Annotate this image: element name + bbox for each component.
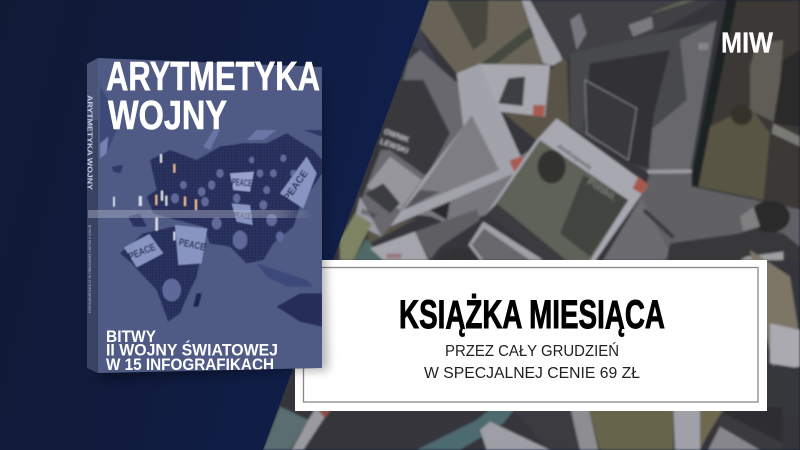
Iceland: [112, 165, 123, 173]
white cover V BOJU: [522, 0, 570, 66]
subtitle: BITWY: [106, 327, 157, 346]
book spine: [86, 58, 98, 373]
books top-left part of photo: MIW: [387, 251, 402, 260]
wood table: [500, 57, 570, 147]
Indonesia: [257, 263, 313, 287]
white book with red corner: [390, 64, 526, 227]
lower-left books: [370, 232, 428, 260]
inner frame: [304, 268, 758, 402]
blue strip: [412, 28, 437, 65]
book NOWIK: [353, 50, 481, 237]
bottom strip books: [263, 407, 783, 450]
books top-left part of photo: LEWSKI: [379, 137, 410, 155]
Arctic fragments: [203, 130, 220, 150]
subtitle line 2: W SPECJALNEJ CENIE 69 ZŁ: [424, 365, 640, 382]
PEACE signs: PEACE: [282, 168, 311, 203]
book shadow: [95, 75, 328, 380]
PEACE signs: [124, 157, 317, 267]
book: Arytmetyka wojny: WOJNY: [108, 92, 227, 138]
title: ARYTMETYKA: [106, 53, 320, 99]
books top-left part of photo: V BOJU: [538, 4, 575, 64]
background photo: scattered books: [250, 0, 800, 450]
heading: KSIĄŻKA MIESIĄCA: [399, 293, 665, 337]
subtitle: W 15 INFOGRAFIKACH: [106, 355, 274, 374]
PEACE signs: PEACE: [127, 242, 158, 263]
photo with soldier: [603, 173, 800, 260]
books top-left part of photo: [340, 0, 575, 260]
book Jedrzejewski: [487, 118, 648, 263]
subtitle: II WOJNY ŚWIATOWEJ: [106, 340, 278, 360]
books top-left part of photo: OWNIK: [383, 127, 411, 144]
PEACE signs: PEACE: [231, 177, 252, 190]
pins: [113, 154, 197, 240]
small white book: [479, 64, 550, 117]
white promo panel: [295, 260, 767, 411]
Australia: [277, 293, 322, 327]
subtitle line 1: PRZEZ CAŁY GRUDZIEŃ: [445, 341, 619, 360]
books top-left part of photo: MIW: [360, 207, 377, 220]
PEACE signs: PEACE: [233, 210, 252, 221]
Eurasia: [147, 133, 322, 263]
Africa: [120, 227, 207, 322]
book spine: BITWY II WOJNY ŚWIATOWEJ W 15 INFOGRAFIKACH: [88, 225, 92, 313]
timeline band: [88, 210, 313, 218]
top photo: [570, 0, 717, 57]
green book corner: [340, 213, 372, 260]
navy diagonal background: [0, 0, 429, 450]
subtitle: [106, 330, 277, 370]
book: Arytmetyka wojny: [86, 53, 322, 374]
world map: [100, 87, 322, 327]
book front cover: [98, 58, 322, 373]
Madagascar: [193, 293, 202, 307]
right book: [692, 0, 800, 208]
book Jedrzejewski: Polsko,: [585, 177, 619, 203]
book spine: ARYTMETYKA WOJNY: [86, 95, 92, 190]
crowd faces: [162, 155, 296, 301]
logo MIW: MIW: [721, 28, 774, 60]
north america fragment: [100, 88, 116, 150]
books top-right part of photo: MIW: [698, 42, 709, 53]
books top-right part of photo: [530, 0, 800, 260]
Spain: [128, 213, 147, 227]
books behind panel, right side: [750, 250, 800, 420]
PEACE signs: PEACE: [178, 237, 206, 254]
tan book: [420, 0, 543, 90]
book Jedrzejewski: Jendrzejewski: [556, 143, 592, 172]
photo book lower: [407, 147, 537, 227]
big grey photo book: [570, 20, 717, 174]
